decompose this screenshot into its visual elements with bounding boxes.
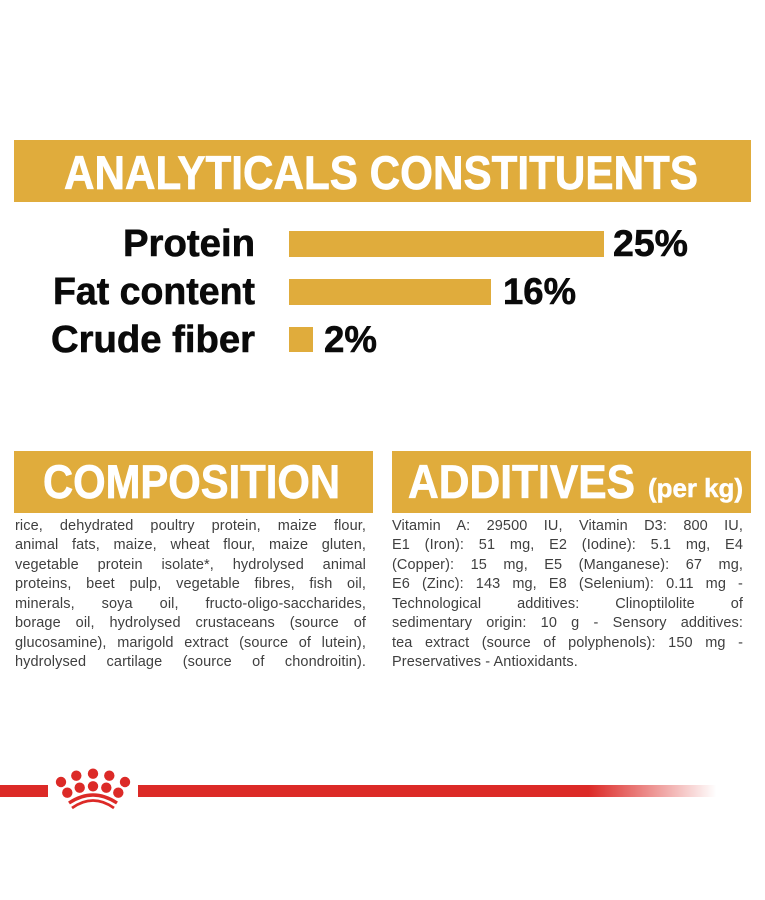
text block: composition: rice, dehydrated poultry protein, maize flour, xyxy=(15,518,366,534)
icon: royal crown logo xyxy=(56,768,130,808)
panel: analyticals constituents header xyxy=(14,140,751,202)
row: protein: 25% xyxy=(613,223,688,264)
text block: composition: animal fats, maize, wheat flour, maize gluten, xyxy=(15,537,366,553)
footer red line right with fade xyxy=(138,785,716,797)
row: fat content: 16% xyxy=(503,271,576,312)
text block: composition: glucosamine), marigold extract (source of lutein), xyxy=(15,635,366,651)
text block: additives: Technological additives: Clinoptilolite of xyxy=(392,596,743,612)
row: fat content xyxy=(53,271,576,313)
panel: composition header xyxy=(14,451,373,513)
text block: composition: minerals, soya oil, fructo-oligo-saccharides, xyxy=(15,596,366,612)
heading unit: per kg: (per kg) xyxy=(648,473,743,503)
text block: additives: E1 (Iron): 51 mg, E2 (Iodine): 5.1 mg, E4 xyxy=(392,537,743,553)
text block: additives: (Copper): 15 mg, E5 (Manganese): 67 mg, xyxy=(392,557,743,573)
row: fat content: Fat content xyxy=(53,271,255,313)
heading: analyticals constituents: ANALYTICALS CONSTITUENTS xyxy=(64,146,698,199)
text block: additives: sedimentary origin: 10 g - Sensory additives: xyxy=(392,615,743,631)
heading: additives: ADDITIVES xyxy=(408,455,635,508)
heading: composition: COMPOSITION xyxy=(43,455,340,508)
text block: additives: Vitamin A: 29500 IU, Vitamin D3: 800 IU, xyxy=(392,518,743,534)
text block: additives: tea extract (source of polyphenols): 150 mg - xyxy=(392,635,743,651)
text block: additives: E6 (Zinc): 143 mg, E8 (Selenium): 0.11 mg - xyxy=(392,576,743,592)
text block: composition: borage oil, hydrolysed crustaceans (source of xyxy=(15,615,366,631)
row: crude fiber: Crude fiber xyxy=(51,319,255,361)
text block: composition: proteins, beet pulp, vegetable fibres, fish oil, xyxy=(15,576,366,592)
text block: additives xyxy=(392,518,743,670)
row: crude fiber xyxy=(51,319,377,361)
row: protein xyxy=(123,223,688,265)
row: crude fiber: 2% xyxy=(324,319,377,360)
row: protein: Protein xyxy=(123,223,255,265)
bar chart: analytical constituents xyxy=(51,223,688,361)
panel: additives header xyxy=(392,451,751,513)
text block: additives: Preservatives - Antioxidants. xyxy=(392,654,578,670)
footer red line left xyxy=(0,785,48,797)
text block: composition: vegetable protein isolate*, hydrolysed animal xyxy=(15,557,366,573)
text block: composition xyxy=(15,518,366,670)
text block: composition: hydrolysed cartilage (source of chondroitin). xyxy=(15,654,366,670)
